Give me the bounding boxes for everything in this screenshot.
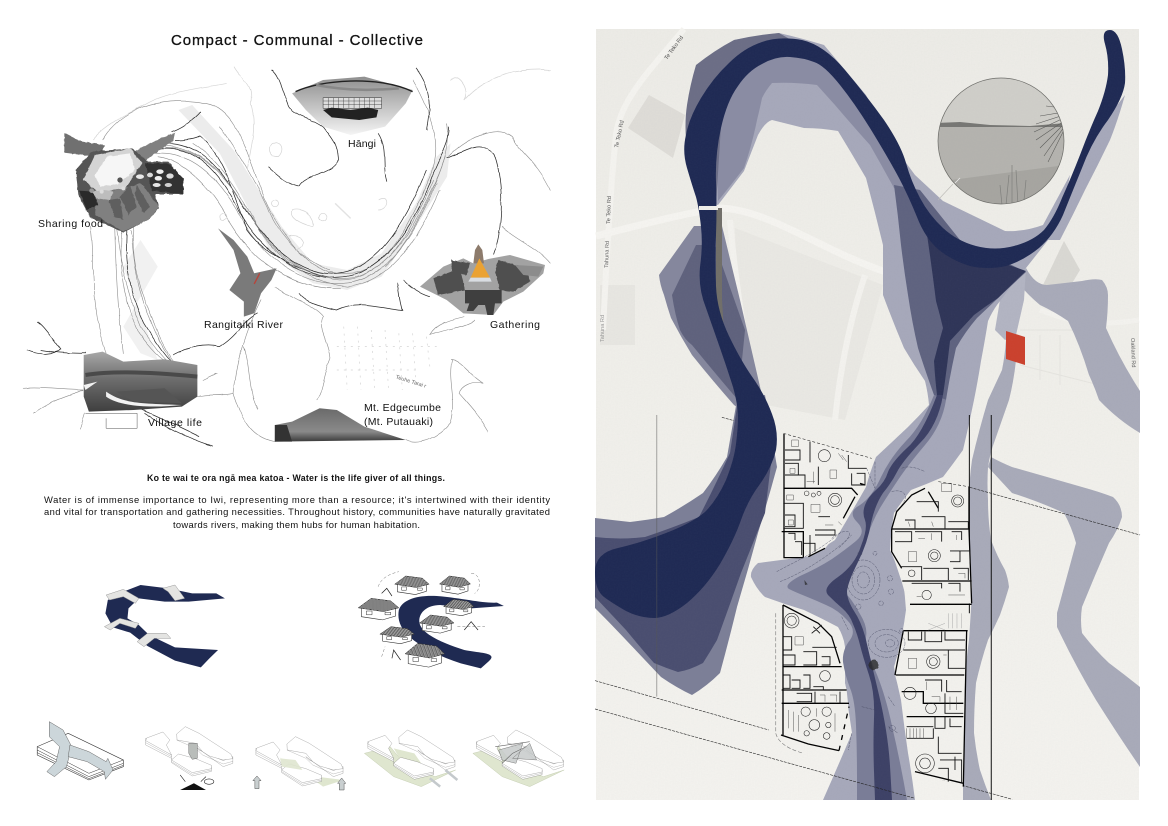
map: town grid: Teuhe Tarai r <box>395 375 427 390</box>
panel: sketches and massing diagrams <box>37 572 564 790</box>
marker: red site block <box>1006 331 1025 365</box>
water: pool dark ring <box>595 400 775 672</box>
plan: north-west wing <box>782 433 872 558</box>
label: Mt. Edgecumbe: Mt. Edgecumbe <box>364 402 441 414</box>
map: town grid <box>335 203 437 390</box>
site lines <box>595 415 1140 800</box>
landscape contours on river <box>842 617 905 750</box>
text block: whakatauki heading: Ko te wai te ora ngā mea katoa - Water is the life giver of all things. <box>147 473 445 483</box>
text: road names: Te Teko Rd <box>664 35 685 61</box>
plan: south-east wing <box>895 613 968 787</box>
water: right meander band <box>988 457 1140 767</box>
panel: river map with cultural vignettes <box>23 67 550 447</box>
paper grain overlay <box>596 29 1139 800</box>
plan: north-east wing <box>892 482 972 605</box>
label: Sharing food: Sharing food <box>38 218 103 230</box>
icon: upward arrow right <box>338 778 346 790</box>
icon: Mt Edgecumbe <box>275 408 406 442</box>
water: central upper mid layer <box>894 185 1026 400</box>
icon: Hangi earth oven <box>292 77 413 135</box>
map: faded roads and blocks <box>596 29 1139 420</box>
title: Compact - Communal - Collective <box>171 32 423 49</box>
water: thin middle stream <box>963 335 1016 800</box>
panel: river site plan <box>595 29 1140 800</box>
water: navy main channel <box>595 30 1125 618</box>
water: pool mid ring <box>595 395 777 695</box>
diagram: massing with landscape <box>364 730 457 787</box>
icon: sharing food <box>64 133 183 233</box>
water: light arch and central arm <box>700 33 1070 800</box>
water: lower-left lobes <box>659 226 770 430</box>
text block: water importance paragraph: and vital for transportation and gathering necessities. Throughout history, communities have naturally gravitated <box>44 506 550 517</box>
icon: North Island locator <box>218 228 277 317</box>
label: Hangi: Hāngi <box>348 138 376 150</box>
plan: south building wings <box>781 605 968 787</box>
water: upper-left dark lobe <box>686 33 800 208</box>
text: road names: Te Teko Rd <box>614 120 626 148</box>
water: central lower mid layer <box>787 395 946 800</box>
water: central lower dark layer <box>826 395 943 800</box>
icon: upward arrow left <box>253 776 261 789</box>
text: road names: Te Teko Rd <box>606 196 613 224</box>
icon: village life <box>84 352 197 428</box>
diagram: stacked layers with river arrows <box>37 722 123 780</box>
plan: south-west wing <box>781 605 849 751</box>
text block: water importance paragraph <box>44 494 550 530</box>
label: Village life: Village life <box>148 417 202 429</box>
diagram: massing with entry views <box>146 727 233 790</box>
diagram: river with bridges <box>104 585 225 667</box>
label: Gathering: Gathering <box>490 319 540 331</box>
text: road names: Tahuna Rd <box>600 315 606 342</box>
icon: gathering around fire <box>420 244 545 315</box>
diagram: river with houses <box>358 572 504 668</box>
text: road names <box>600 35 1136 368</box>
diagram: massing with green core <box>256 737 344 787</box>
diagram: massing with circulation <box>473 730 564 787</box>
photo frame <box>938 78 1064 204</box>
water: band right of upper arm <box>1045 95 1125 240</box>
water: inner arch mid-tone <box>715 40 905 201</box>
photo: circular river view <box>936 76 1066 206</box>
landscape contours on river <box>777 462 925 609</box>
text block: water importance paragraph: Water is of immense importance to Iwi, representing more than a resource; it's intertwined with their identity <box>44 494 550 505</box>
text: road names: Oakland Rd <box>1129 338 1136 368</box>
text block: water importance paragraph: towards rivers, making them hubs for human habitation. <box>173 519 420 530</box>
map: contour base lines <box>23 67 550 447</box>
water: central upper dark triangle <box>925 221 1026 395</box>
map: light river wash <box>123 105 451 360</box>
text: road names: Tahuna Rd <box>604 241 611 268</box>
label: Rangitaiki River: Rangitaiki River <box>204 319 284 331</box>
plan: north building wings <box>777 433 972 609</box>
label: Mt. Putauaki: (Mt. Putauaki) <box>364 416 433 428</box>
water: far right branch <box>1020 268 1140 433</box>
